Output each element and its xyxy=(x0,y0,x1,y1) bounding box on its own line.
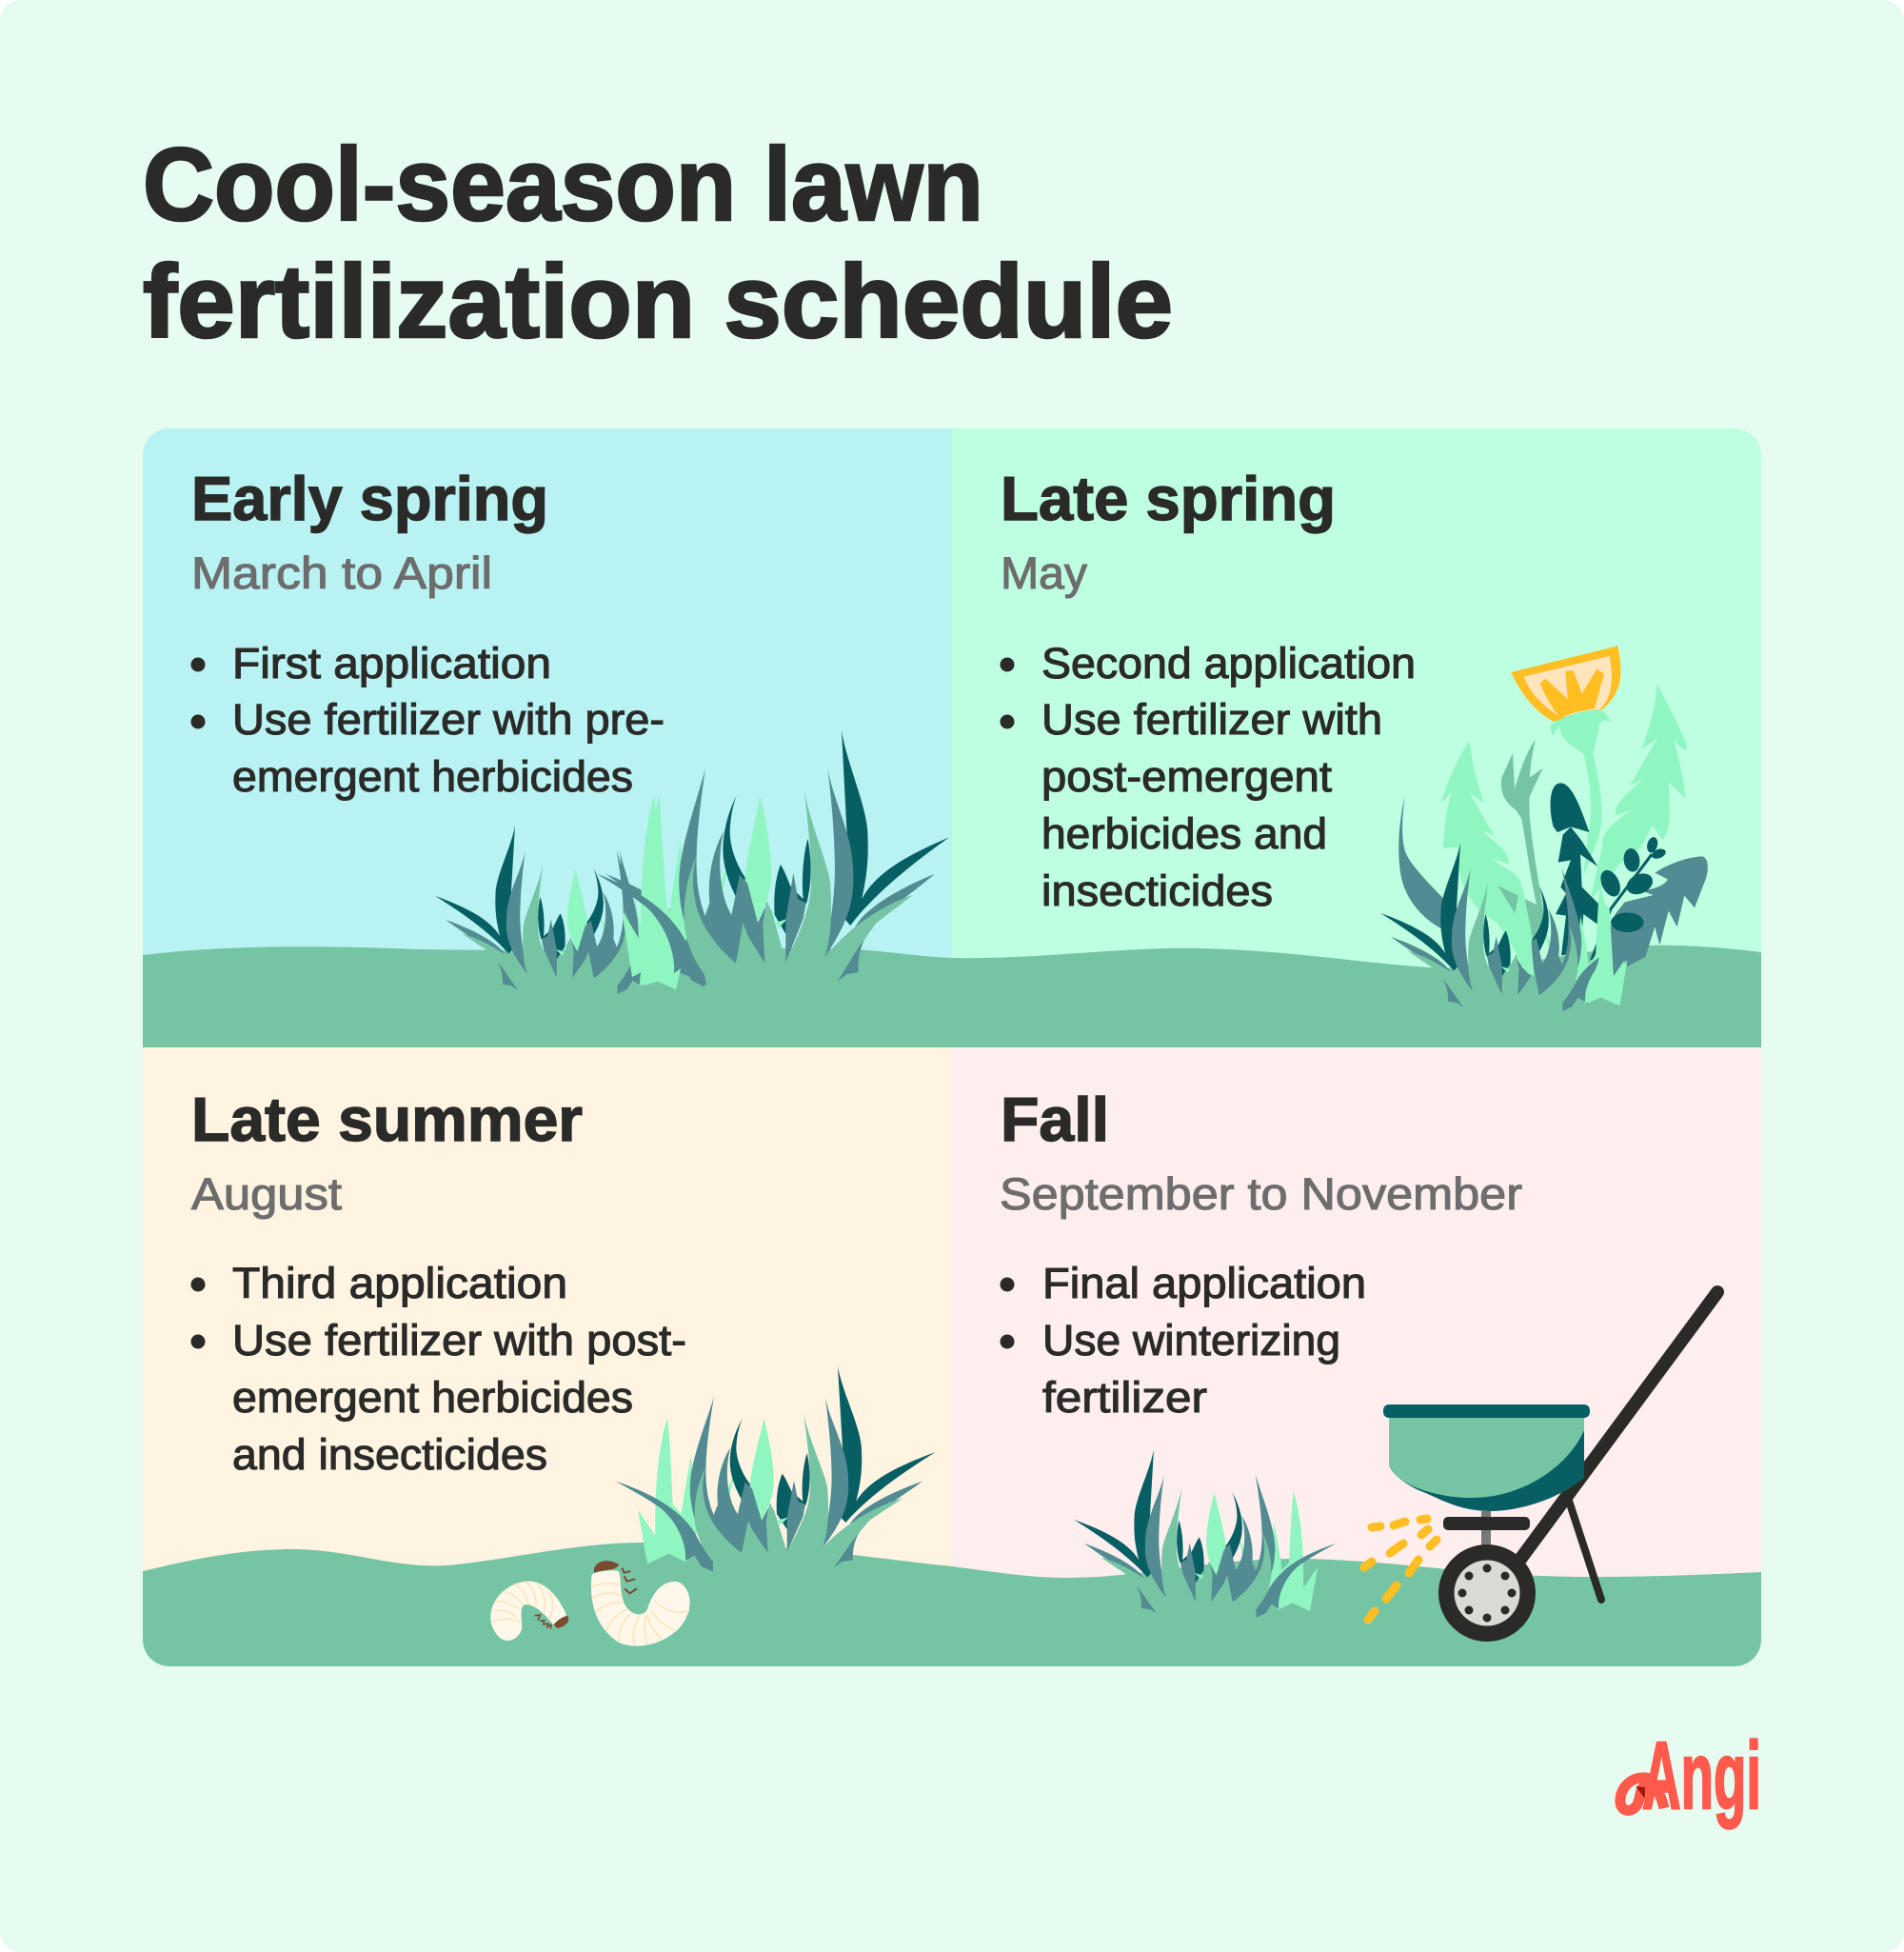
ground: lower row xyxy=(143,1543,1761,1666)
ground: upper row xyxy=(143,946,1761,1047)
kickstand xyxy=(1567,1495,1601,1600)
illustration: fertilizer spreader xyxy=(1364,1292,1717,1642)
bullet list: fall xyxy=(1000,1266,1364,1413)
right serrated leaf xyxy=(1590,684,1687,902)
heading: late spring: Late spring xyxy=(1001,464,1336,533)
dark serrated leaf xyxy=(1551,783,1589,832)
axle bar xyxy=(1443,1517,1530,1530)
bullet list: late summer xyxy=(190,1259,686,1479)
panel: late summer xyxy=(143,1047,952,1571)
left teal leaf xyxy=(1398,796,1457,930)
illustration: fall grass xyxy=(1074,1449,1336,1619)
panel: late spring xyxy=(952,428,1761,967)
bullet list: late summer: and insecticides xyxy=(232,1430,547,1479)
title: fertilization schedule xyxy=(143,244,1173,360)
right teal leaf xyxy=(1602,856,1708,978)
bullet list: late spring: post-emergent xyxy=(1041,752,1333,801)
bullet list: late summer: Use fertilizer with post- xyxy=(232,1316,686,1364)
title: Cool-season lawn xyxy=(143,127,983,243)
fertilizer granules xyxy=(1364,1519,1437,1620)
illustration: late summer grass xyxy=(616,1366,936,1573)
bullet list: late spring xyxy=(1000,639,1416,915)
date range: august: August xyxy=(191,1168,342,1219)
heading: fall: Fall xyxy=(1001,1085,1109,1154)
post xyxy=(1481,1511,1491,1549)
logo: Angi xyxy=(1620,1723,1761,1829)
bullet list: fall: Use winterizing xyxy=(1042,1316,1340,1364)
bullet list: late spring: Use fertilizer with xyxy=(1041,695,1382,744)
green forked weed xyxy=(1497,740,1545,943)
left serrated leaf xyxy=(1441,741,1535,976)
illustration: grub, right xyxy=(591,1561,690,1646)
bullet list: early spring: Use fertilizer with pre- xyxy=(232,695,664,744)
sprig xyxy=(1592,854,1652,960)
date range: march to april: March to April xyxy=(191,548,492,598)
bullet list: late summer: emergent herbicides xyxy=(232,1373,633,1422)
logo: Angi: Angi xyxy=(1642,1723,1761,1829)
hopper xyxy=(1389,1417,1584,1511)
illustration: dandelion and weeds xyxy=(1380,646,1708,1012)
bullet list: late spring: Second application xyxy=(1041,639,1416,687)
flower head xyxy=(1511,646,1620,722)
bullet list: late spring: herbicides and xyxy=(1041,809,1327,858)
bullet list: fall: fertilizer xyxy=(1042,1373,1207,1422)
bullet list: early spring: First application xyxy=(232,639,551,687)
heading: early spring: Early spring xyxy=(191,464,548,533)
bullet list: late spring: insecticides xyxy=(1041,866,1273,915)
bullet list: early spring: emergent herbicides xyxy=(232,752,633,801)
heading: late summer: Late summer xyxy=(191,1085,583,1154)
handle xyxy=(1514,1292,1717,1568)
date range: may: May xyxy=(1001,548,1088,598)
wheel xyxy=(1438,1544,1536,1642)
bullet list: early spring xyxy=(190,639,664,801)
bullet list: late summer: Third application xyxy=(232,1259,567,1307)
title xyxy=(143,127,1173,360)
illustration: grub, left xyxy=(490,1582,568,1641)
bullet list: fall: Final application xyxy=(1042,1259,1366,1307)
illustration: early spring grass xyxy=(435,730,949,995)
stem and flower base xyxy=(1551,709,1611,876)
hopper rim xyxy=(1383,1404,1590,1418)
date range: september to november: September to November xyxy=(1000,1168,1522,1219)
panel: early spring xyxy=(143,428,952,958)
panel: fall xyxy=(952,1047,1761,1578)
